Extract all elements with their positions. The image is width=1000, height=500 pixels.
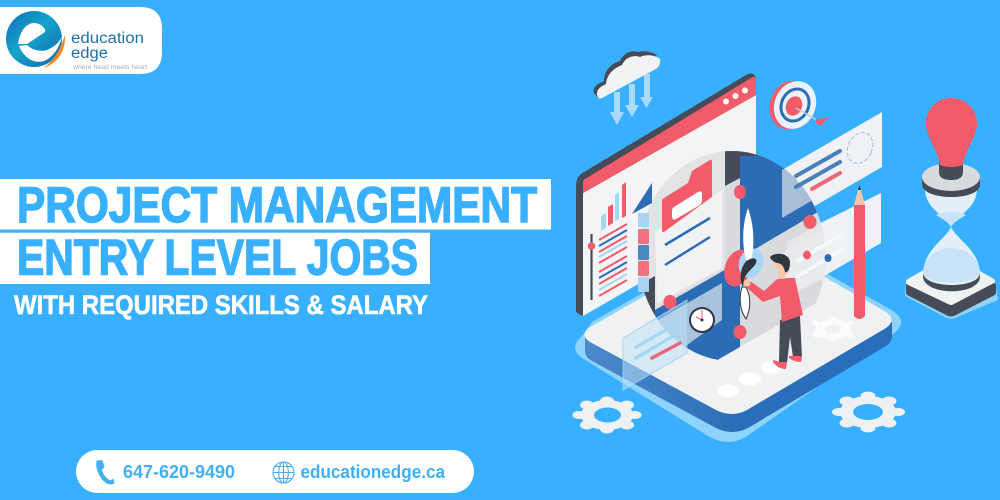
- platform side: [585, 322, 892, 432]
- illustration: isometric project workspace: [572, 51, 998, 442]
- platform top: [584, 237, 892, 414]
- card bottom sliders: [798, 235, 841, 276]
- grey right wall: [756, 212, 821, 249]
- base top: [906, 256, 995, 305]
- lower ring: [923, 273, 980, 291]
- lens base: [644, 154, 821, 310]
- upper glass: [925, 190, 977, 227]
- magnifying lens scene: [638, 151, 826, 360]
- logo wordmark: [71, 30, 147, 71]
- triangle chart: [632, 183, 652, 214]
- pencil: [854, 185, 865, 319]
- card top lines: [796, 151, 840, 189]
- lower glass: [923, 227, 980, 286]
- contact pill: [76, 450, 474, 493]
- blue floor: [655, 270, 740, 360]
- folder: [662, 160, 712, 232]
- person: [744, 254, 803, 369]
- legs: [779, 316, 802, 363]
- dark rim: [725, 151, 770, 186]
- gear left: [572, 396, 642, 434]
- bar chart: [601, 182, 626, 231]
- platform halo: [575, 234, 901, 442]
- logo wordmark: edge: [71, 45, 108, 62]
- blue back wall: [740, 160, 817, 250]
- logo wordmark: education: [71, 30, 144, 47]
- glass card lower left: [623, 300, 687, 390]
- base halo: [905, 255, 998, 319]
- arm and torso: [745, 278, 803, 322]
- inner card over top right: [782, 169, 812, 218]
- window dots: [723, 88, 748, 104]
- icon: education edge swirl: [6, 11, 65, 68]
- bulb: [926, 98, 977, 167]
- lens left translucent sheet over window: [639, 152, 725, 308]
- needle compass: [719, 208, 767, 319]
- browser window: [576, 74, 756, 316]
- lightbulb hourglass: [905, 98, 998, 319]
- right card bottom: [780, 193, 881, 290]
- target with dart: [762, 74, 830, 136]
- colour swatches: [638, 213, 649, 292]
- phone number: 647-620-9490: [123, 461, 235, 482]
- socket: [939, 160, 963, 180]
- title band 2: ENTRY LEVEL JOBS: [17, 230, 418, 286]
- inner card over bottom right: [785, 249, 825, 291]
- gear right: [832, 392, 905, 432]
- icon: phone: [97, 460, 114, 484]
- gear on platform: [812, 316, 854, 342]
- title band 1: PROJECT MANAGEMENT: [17, 177, 537, 233]
- text lines: [599, 224, 627, 296]
- shoes: [773, 356, 802, 369]
- stepping stones: [717, 360, 783, 398]
- cloud with arrows: [594, 51, 660, 125]
- hand: [744, 280, 750, 286]
- red pins: [664, 185, 816, 339]
- disc: [922, 177, 980, 197]
- base dark: [906, 259, 996, 316]
- subtitle: WITH REQUIRED SKILLS & SALARY: [14, 290, 428, 320]
- document lines: [665, 218, 710, 265]
- clock card: [655, 283, 722, 350]
- logo wordmark: where head meets heart: [72, 65, 147, 71]
- floor inside lens: [718, 304, 815, 361]
- slider: [588, 234, 595, 300]
- logo badge: [0, 7, 162, 74]
- right card top: [782, 112, 882, 225]
- website: educationedge.ca: [300, 461, 446, 482]
- head: [773, 262, 789, 279]
- icon: globe: [273, 462, 294, 483]
